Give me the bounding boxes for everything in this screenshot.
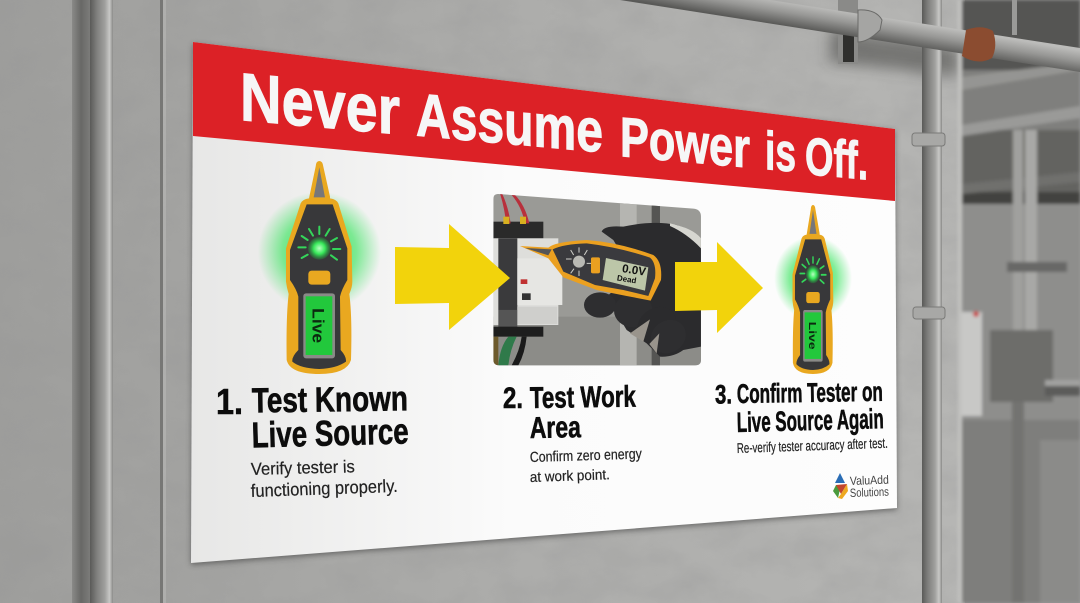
logo: ValuAdd Solutions: Solutions	[850, 485, 889, 500]
title: Never Assume Power is Off.: Power	[620, 105, 750, 180]
step 1 heading: Live Source	[251, 410, 409, 455]
left conduit pipes	[72, 0, 113, 603]
arrow 1	[395, 224, 510, 330]
step 2: photo of tester on breaker	[490, 190, 707, 370]
step 2 description	[530, 446, 643, 486]
step 3: tester icon: Live	[806, 322, 818, 350]
sign panel	[191, 42, 897, 565]
title: Never Assume Power is Off.: Never	[240, 59, 400, 149]
red title banner	[193, 42, 895, 201]
step 2 heading: 2.	[503, 382, 523, 415]
glove	[602, 223, 701, 357]
title: Never Assume Power is Off.	[240, 59, 868, 192]
arrow 2	[675, 242, 763, 333]
step 2 heading: Area	[530, 411, 581, 445]
step 3 description: Re-verify tester accuracy after test.	[737, 435, 888, 456]
step 2 description: at work point.	[530, 467, 610, 486]
step 1 description	[250, 456, 398, 501]
title: Never Assume Power is Off.: Assume	[416, 81, 603, 165]
logo: ValuAdd Solutions	[833, 473, 889, 500]
step 3: tester icon	[774, 205, 852, 374]
step 2 description: Confirm zero energy	[530, 446, 643, 466]
step 2 heading: Test Work	[530, 381, 636, 415]
step 1 description: functioning properly.	[250, 476, 398, 501]
meter tool	[520, 240, 661, 301]
step 3 heading: Confirm Tester on	[737, 377, 883, 409]
title: Never Assume Power is Off.: Off.	[805, 127, 868, 192]
step 1: tester icon	[258, 161, 381, 374]
step 1 heading	[216, 379, 409, 455]
step 2 heading	[503, 381, 636, 445]
step 1 description: Verify tester is	[251, 456, 355, 479]
step 1 heading: 1.	[216, 381, 243, 422]
step 2: photo of tester on breaker: 0.0V	[621, 262, 647, 279]
overhead horizontal pipe	[620, 0, 1080, 72]
background: right room	[958, 0, 1080, 603]
step 1: tester icon: Live	[309, 308, 328, 343]
step 3 heading	[715, 377, 884, 438]
step 3 heading: 3.	[715, 380, 732, 410]
step 2: photo of tester on breaker: Dead	[616, 273, 637, 285]
step 1 heading: Test Known	[252, 379, 408, 420]
logo: ValuAdd Solutions: ValuAdd	[850, 473, 889, 488]
right vertical conduit	[912, 0, 945, 603]
title: Never Assume Power is Off.: is	[765, 121, 796, 184]
step 3 heading: Live Source Again	[736, 403, 884, 438]
